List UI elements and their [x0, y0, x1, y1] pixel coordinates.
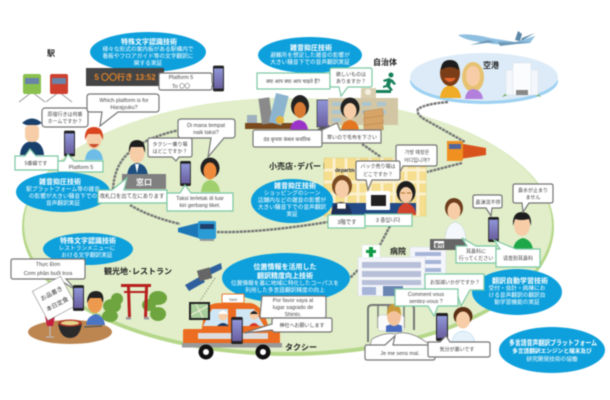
- label: tourist spot restaurant: 観光地･レストラン: [104, 266, 172, 276]
- panel: platform: 多言語翻訳エンジンと端末及び: [512, 347, 592, 355]
- callout: bag counter japanese: [356, 161, 400, 190]
- panel: special character recognition: 看板やフロアガイド等の文字翻訳に: [102, 52, 194, 60]
- label: taxi: タクシー: [285, 342, 317, 352]
- icon: green and red trains: [19, 74, 72, 102]
- icon: phone: [213, 66, 224, 91]
- restaurant menu card: 本日定食: [45, 295, 70, 313]
- callout: shinto japanese: 神社へお願いします: [279, 322, 325, 329]
- panel: automatic learning: ける音声翻訳の翻訳自: [489, 291, 545, 299]
- restaurant menu card: お品書き: [39, 284, 64, 303]
- panel: noise suppression disaster: [258, 37, 362, 73]
- green city ground: [22, 98, 554, 356]
- panel: noise suppression disaster: 避難所を想定した雑音の影響が: [270, 51, 350, 59]
- panel: noise suppression shopping: [251, 179, 333, 223]
- callout: taxi reply indonesian: Taksi terletak di luar: [176, 196, 224, 202]
- ticket counter: 窓口: [136, 177, 152, 187]
- callout: runny nose chinese: 鼻涕流不停: [475, 199, 501, 206]
- person: ticket counter staff: [127, 140, 148, 176]
- callout: i feel sick japanese: [428, 336, 490, 357]
- panel: restaurant menu recognition: おける文字翻訳実証: [61, 251, 113, 259]
- callout: go to ENT chinese: 请查别耳鼻科: [503, 255, 533, 262]
- panel: location information: 利用した多言語翻訳精度の向上: [245, 286, 325, 294]
- icon: satellite: [185, 263, 222, 301]
- callout: taxi reply indonesian: kiri gerbang tiket.: [179, 203, 221, 209]
- reception desk: 受付: [434, 242, 444, 249]
- icon: car navigation map: [189, 302, 210, 320]
- hospital bed with patient: [368, 304, 430, 345]
- label: station: 駅: [47, 49, 55, 58]
- callout: taxi stand indonesian: Di mana tempat: [187, 123, 226, 129]
- icon: airplane: [458, 31, 535, 46]
- panel: automatic learning: [472, 269, 562, 315]
- callout: which platform english: Which platform is for: [99, 98, 149, 104]
- callout: runny nose japanese: ません: [526, 195, 540, 201]
- panel: noise suppression station: 駅プラットフォーム等の雑音: [26, 185, 100, 193]
- icon: phone: [231, 317, 243, 344]
- panel: noise suppression station: 音声翻訳実証: [46, 199, 80, 207]
- panel: noise suppression disaster: 大きい騒音下での音声翻訳実証: [270, 58, 350, 66]
- label: retail store: 小売店･デパート: [269, 161, 329, 171]
- callout: go to ENT japanese: 耳鼻科に: [466, 248, 486, 255]
- panel: noise suppression shopping: ショッピングのシーン: [264, 189, 321, 197]
- callout: hindi question: [257, 73, 330, 89]
- callout: bag counter korean: 어디입니까?: [404, 157, 430, 164]
- callout: bag counter korean: 가방 매장은: [405, 149, 430, 156]
- panel: restaurant menu recognition: レストランメニューに: [59, 245, 116, 252]
- callout: runny nose chinese: [473, 195, 502, 216]
- trees: [102, 291, 167, 322]
- person: shop customer: [331, 175, 352, 215]
- callout: platform 5 japanese reply: [15, 149, 58, 170]
- callout: vietnamese menu: [11, 259, 85, 290]
- panel: restaurant menu recognition: 特殊文字認識技術: [60, 236, 116, 245]
- callout: shinto spanish: Por favor vaya al: [273, 298, 313, 304]
- callout: which platform japanese: ホームですか？: [48, 118, 82, 125]
- torii gate: [121, 284, 151, 320]
- blanket stack: [364, 109, 383, 132]
- collapsed buildings: [245, 93, 293, 129]
- panel: platform: 研究開発技術の協働: [526, 355, 578, 363]
- person: nurse: [452, 307, 475, 342]
- callout: third floor korean: 3 층입니다: [376, 216, 400, 224]
- icon: phone: [73, 285, 84, 311]
- callout: how are you french: sentez-vous ?: [409, 299, 443, 305]
- callout: go to ENT chinese: [494, 240, 540, 267]
- panel: noise suppression station: の影響が大きい騒音下での: [29, 192, 97, 200]
- callout: shinto japanese: [244, 318, 332, 333]
- callout: go to ENT japanese: 行ってください: [459, 255, 493, 262]
- callout: what do you need: [330, 68, 372, 96]
- callout: platform 5 japanese reply: 5番線です: [25, 160, 47, 167]
- icon: phone: [436, 313, 448, 341]
- callout: shinto spanish: Shinto.: [285, 312, 301, 318]
- department store building: departm: [335, 168, 355, 174]
- icon: green cross: [362, 245, 380, 258]
- ticket counter: [122, 174, 166, 189]
- icon: blue train: [178, 221, 216, 241]
- taxi: TAXI: [229, 298, 237, 302]
- label: hospital: 病院: [390, 246, 406, 256]
- icon: phone: [180, 161, 191, 186]
- callout: ticket gate reply: [98, 178, 167, 203]
- person: shop clerk with glasses: [396, 181, 416, 215]
- callout: which platform english: Harajyuku?: [110, 105, 138, 111]
- panel: noise suppression station: 雑音抑圧技術: [39, 177, 81, 186]
- panel: restaurant menu recognition: [43, 233, 133, 265]
- panel: automatic learning: 動学習機能の実証: [494, 298, 540, 306]
- person: blonde woman: [462, 62, 484, 99]
- callout: bag counter japanese: バック売り場は: [360, 163, 396, 170]
- panel: special character recognition: 様々な形式の案内板がある駅構内で: [102, 45, 194, 53]
- callout: how are you japanese: [425, 274, 484, 306]
- person: dark-skinned man: [440, 60, 461, 98]
- railway track: [113, 102, 465, 278]
- callout: blanket please: 寒いので毛布を下さい: [327, 134, 377, 141]
- callout: shinto spanish: lugar sagrado de: [273, 305, 313, 311]
- restaurant table with food: [28, 316, 112, 344]
- icon: phone: [488, 217, 499, 242]
- callout: bag counter korean: [396, 145, 437, 178]
- panel: location information: [222, 253, 350, 303]
- panel: special character recognition: 特殊文字認識技術: [121, 37, 177, 46]
- panel: location information: 位置情報を基に地域に特化したコーパスを: [231, 279, 339, 287]
- callout: how are you japanese: お加減いかがですか？: [430, 279, 480, 286]
- label: municipality: 自治体: [373, 57, 397, 67]
- callout: taxi stand indonesian: naik taksi?: [193, 130, 219, 136]
- panel: platform: [499, 327, 605, 373]
- callout: hindi question: क्या आप क्या आप चाहते हैं?: [266, 78, 320, 85]
- person: woman in orange: [340, 98, 360, 130]
- callout: platform 5 to: [159, 73, 213, 90]
- person: woman in green: [200, 158, 220, 192]
- callout: which platform japanese: 原宿行きは何番: [47, 111, 83, 118]
- person: station staff: [20, 118, 44, 155]
- callout: ticket gate reply: 改札口を出て左にあります: [100, 192, 164, 200]
- panel: airport disc: [410, 53, 558, 104]
- panel: automatic learning: 受付・会計・病棟にお: [489, 284, 546, 292]
- callout: platform 5 to: To 〇〇: [172, 83, 191, 90]
- callout: runny nose japanese: 鼻水が止まり: [518, 187, 548, 194]
- callout: hindi blanket: ठंड कृपया कंबल कवतिक: [263, 136, 312, 143]
- panel: noise suppression station: [16, 172, 110, 212]
- callout: what do you need: ありますか？: [336, 78, 366, 85]
- callout: i feel sick french: [365, 336, 435, 360]
- callout: vietnamese menu: Thực Đơn: [36, 262, 60, 268]
- panel: special character recognition: 関する実証: [134, 59, 163, 67]
- panel: noise suppression shopping: 実証: [286, 210, 298, 218]
- callout: third floor japanese: [328, 215, 365, 228]
- LED departure board: 5 〇〇行き 13:52: [94, 72, 156, 82]
- callout: taxi stand japanese: [148, 138, 192, 161]
- person: red-haired man: [85, 127, 103, 160]
- callout: which platform japanese: [42, 108, 88, 127]
- callout: shinto spanish: [260, 296, 326, 318]
- callout: taxi stand indonesian: [178, 119, 235, 157]
- icon: phone: [64, 131, 75, 156]
- callout: how are you french: Comment vous: [408, 292, 444, 298]
- panel: location information: 位置情報を活用した: [254, 262, 316, 271]
- callout: platform 5 to: Platform 5: [169, 75, 193, 81]
- sales terminal: [366, 191, 390, 210]
- icon: orange train: [447, 141, 486, 161]
- panel: noise suppression shopping: 店舗内などの雑音の影響が: [258, 196, 326, 204]
- airport building: [502, 63, 541, 97]
- callout: third floor korean: [365, 214, 412, 226]
- callout: platform 5 reply: Platform 5: [69, 165, 93, 171]
- callout: how are you french: [395, 289, 458, 316]
- person: man in green: [513, 212, 533, 250]
- hospital building: [358, 247, 446, 296]
- panel: noise suppression shopping: 雑音抑圧技術: [274, 181, 316, 190]
- restaurant menu card: [32, 276, 76, 321]
- callout: third floor japanese: 3階です: [337, 218, 357, 226]
- callout: blanket please: [322, 123, 381, 143]
- callout: hindi blanket: [253, 130, 322, 147]
- callout: i feel sick french: Je me sens mal.: [380, 351, 420, 357]
- person: hospital receptionist: [445, 198, 466, 240]
- callout: platform 5 reply: [58, 154, 103, 172]
- label: airport: 空港: [483, 60, 499, 70]
- department store building: [324, 158, 426, 216]
- callout: runny nose japanese: [513, 184, 553, 212]
- callout: i feel sick japanese: 気分が悪いです: [440, 346, 474, 353]
- callout: go to ENT japanese: [456, 238, 496, 263]
- callout: taxi stand japanese: はどこですか？: [153, 148, 187, 155]
- panel: special character recognition: [90, 32, 206, 72]
- panel: noise suppression disaster: 雑音抑圧技術: [290, 43, 332, 52]
- icon: tablet on stand: [316, 100, 331, 130]
- municipal building: [328, 88, 398, 125]
- LED departure board: [86, 68, 164, 86]
- callout: which platform english: [87, 94, 159, 126]
- panel: automatic learning: 翻訳自動学習技術: [492, 276, 548, 285]
- panel: location information: 翻訳精度向上技術: [257, 271, 313, 280]
- person: woman in purple: [290, 95, 309, 130]
- callout: taxi stand japanese: タクシー乗り場: [152, 141, 188, 148]
- panel: noise suppression shopping: 大きい騒音下での音声翻訳: [258, 203, 326, 211]
- reception desk: [430, 239, 466, 250]
- callout: what do you need: 欲しいものは: [336, 71, 366, 78]
- callout: bag counter japanese: どこですか？: [363, 171, 393, 178]
- person: man at restaurant: [86, 291, 105, 325]
- callout: vietnamese menu: Cơm phần buổi trưa: [24, 270, 72, 277]
- taxi: [182, 294, 282, 360]
- icon: emergency exit: [376, 72, 396, 93]
- callout: taxi reply indonesian: [167, 185, 233, 211]
